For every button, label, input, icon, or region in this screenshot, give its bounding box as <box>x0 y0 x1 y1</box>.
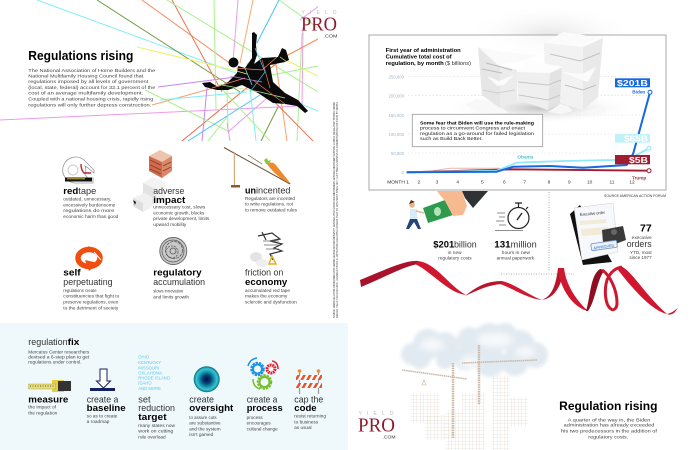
paper stacks illustration <box>445 32 635 124</box>
grid lines and y axis <box>388 74 648 175</box>
step: set reduction target <box>138 355 176 439</box>
panel: friction on economy <box>245 232 297 304</box>
step: cap the code <box>294 369 327 430</box>
chart heading: ($ billions) <box>445 61 471 67</box>
panel: unincented <box>224 148 298 213</box>
chart heading <box>386 48 471 67</box>
panel: self perpetuating: constituencies that fight to <box>63 294 120 299</box>
panel: paperwork hours stat <box>494 203 537 260</box>
x axis months: 11 <box>610 180 615 186</box>
body paragraph <box>28 68 156 108</box>
x axis months: MONTH 1 <box>387 180 409 186</box>
panel: unincented: to write regulations, not <box>245 202 294 207</box>
callout: process to circumvent Congress and enact <box>420 126 526 132</box>
panel: regulation fix <box>0 323 348 450</box>
panel: paperwork hours stat: 131 <box>494 240 511 250</box>
step: measure: the regulation <box>28 411 58 416</box>
panel: regulatory costs stat: billion <box>454 240 477 250</box>
logo: Yield Pro top: PRO <box>301 14 337 36</box>
label: Trump: Trump <box>632 176 647 181</box>
panel: regulation rising summary <box>559 399 658 439</box>
top haze behind paper <box>465 4 635 68</box>
panel: adverse impact: adverse <box>153 186 184 197</box>
body paragraph: The National Association of Home Builders and the <box>28 68 156 73</box>
panel: red tape: economic harm than good <box>63 214 119 219</box>
x axis months: 2 <box>418 180 421 186</box>
panel: friction on economy: friction on <box>245 268 283 279</box>
heading: regulation fix: fix <box>68 337 80 348</box>
panel: paperwork hours stat: annual paperwork <box>497 255 535 260</box>
panel: self perpetuating: regulations create <box>63 288 97 293</box>
icon: arrow onto baseline <box>90 369 115 391</box>
grid lines and y axis: 50,000 <box>391 151 405 156</box>
panel: red tape: regulations do more <box>63 208 115 213</box>
illustration: cloud and cranes over buildings <box>401 323 548 450</box>
panel: regulatory accumulation: slows innovation <box>153 289 184 294</box>
icon: executive order and stamp: Executive order <box>580 210 605 217</box>
body paragraph: regulations will only further depress construction. <box>28 103 151 108</box>
panel: self perpetuating: to the detriment of society <box>63 305 119 310</box>
panel: adverse impact: impact <box>153 195 186 206</box>
state list <box>138 355 171 391</box>
x axis months: 5 <box>481 180 484 186</box>
panel: red tape: tape <box>78 186 96 197</box>
panel: regulation rising summary: A quarter of the way in, the Biden <box>568 417 651 422</box>
label: Biden: $201B <box>617 78 648 88</box>
grid lines and y axis: 150,000 <box>388 113 405 118</box>
x axis months: 4 <box>456 180 459 186</box>
colored lines background <box>0 0 327 141</box>
step: create a process: create a <box>247 394 278 405</box>
grid lines and y axis: 200,000 <box>388 94 405 98</box>
panel: red tape <box>63 157 119 219</box>
step: create oversight: isn't gamed <box>189 432 214 437</box>
callout: Some fear that Biden will use the rule-making <box>420 120 534 126</box>
step: create oversight: are substantive <box>189 421 221 426</box>
intro text: devised a 6-step plan to get <box>28 354 90 359</box>
icon: friction machine <box>250 232 282 267</box>
x axis months: 9 <box>568 180 571 186</box>
icon: scribble ball <box>160 238 187 264</box>
panel: self perpetuating <box>63 246 120 310</box>
x axis months: 10 <box>587 180 593 186</box>
panel: regulatory costs stat: regulatory costs <box>438 255 472 260</box>
step: create oversight: create <box>189 394 214 405</box>
icon: carrot on stick <box>224 148 291 188</box>
vertical source credits: IMAGES: YIELD PRO GRAPHICS, LICENSED STOCK ILLUSTRATION; EXECUTIVE ORDERS YEAR TO DATE MOST SINCE 1977; LAST TWELVE MONTHS OF ADMINISTRATION COST DATA BY MONTH <box>335 102 339 318</box>
panel: self perpetuating: perpetuating <box>63 277 113 288</box>
step: baseline <box>87 369 126 424</box>
step: create a process: process <box>247 415 263 420</box>
panel: regulation rising summary: regulatory costs. <box>588 434 628 439</box>
step: measure: the impact of <box>28 404 57 409</box>
logo: Yield Pro top: .COM <box>324 34 338 38</box>
panel: executive orders stat: 77 <box>640 223 652 235</box>
panel: regulatory accumulation: accumulation <box>153 277 205 288</box>
label: Biden <box>615 78 650 94</box>
panel: adverse impact: unnecessary cost, slows <box>153 204 206 209</box>
step: cap the code: to business <box>294 419 319 424</box>
grid lines and y axis: 250,000 <box>388 74 405 80</box>
panel: regulatory costs stat <box>406 191 488 260</box>
step: create oversight <box>189 366 234 437</box>
panel: adverse impact <box>133 150 210 227</box>
intro text: Mercatus Center researchers <box>28 349 90 354</box>
panel: executive orders stat: executive <box>632 235 652 240</box>
panel: friction on economy: accumulated red tape <box>245 288 291 293</box>
icon: tape measure <box>28 380 71 392</box>
step: set reduction target: set <box>138 394 151 405</box>
grid lines and y axis: 100,000 <box>388 132 405 137</box>
vertical source credits <box>332 102 339 318</box>
panel: regulatory costs stat: $201 <box>433 240 454 250</box>
step: set reduction target: many states now <box>138 423 176 428</box>
logo: Yield Pro bottom: PRO <box>358 416 395 436</box>
body paragraph: (local, state, federal) account for 32.1 percent of the <box>28 85 156 90</box>
step: create oversight: to assure cuts <box>189 415 217 420</box>
label: Trump <box>615 155 650 181</box>
panel: adverse impact: upward mobility <box>153 222 187 227</box>
panel: paperwork hours stat: million <box>511 240 537 250</box>
x axis months: 3 <box>436 180 439 186</box>
vertical source credits: SOURCE: AMERICAN ACTION FORUM; MERCATUS CENTER GEORGE MASON UNIVERSITY; NATIONAL ASSOCIATION OF HOME BUILDERS; NATIONAL MULTIFAMILY HOUSING COUNCIL; REGULATORY STUDIES CENTER <box>332 102 336 318</box>
panel: adverse impact: private development, limits <box>153 216 210 221</box>
step: baseline: baseline <box>87 403 126 414</box>
logo: Yield Pro top: YIELD <box>302 10 337 16</box>
panel: red tape: outdated, unnecessary, <box>63 197 111 202</box>
chart heading: regulation, by month <box>386 61 444 67</box>
cranes <box>402 345 537 438</box>
panel: regulatory costs stat: in new <box>448 250 462 255</box>
body paragraph: Coupled with a national housing crisis, rapidly rising <box>28 97 154 102</box>
heading: regulation fix: regulation <box>28 337 68 348</box>
x axis months: 7 <box>523 180 526 186</box>
state list: KENTUCKY <box>138 360 161 365</box>
red ribbon <box>360 261 678 315</box>
panel: executive orders stat <box>570 203 652 265</box>
body paragraph: cost of an average multifamily development. <box>28 91 143 96</box>
logo: Yield Pro bottom: YIELD <box>358 411 394 417</box>
chart heading: First year of administration <box>386 48 461 54</box>
panel: regulation rising summary: Regulation rising <box>559 399 657 413</box>
buildings <box>410 375 528 450</box>
step: cap the code: code <box>294 403 317 414</box>
step: set reduction target: target <box>138 412 167 423</box>
x axis months <box>387 180 635 186</box>
state list: OHIO <box>138 355 149 360</box>
panel: regulation rising summary: his two predecessors in the addition of <box>561 428 658 433</box>
step: baseline: create a <box>87 394 119 405</box>
icon: executive order and stamp: APPROVED <box>593 244 615 250</box>
label: Biden: Biden <box>632 89 646 94</box>
x axis months: 6 <box>503 180 506 186</box>
step: set reduction target: reduction <box>138 403 175 414</box>
panel: executive orders stat: YTD, most <box>630 250 652 255</box>
panel: unincented: un <box>245 185 256 196</box>
panel: red tape: red <box>63 186 78 197</box>
panel: red tape: excessively burdensome <box>63 202 116 207</box>
data lines <box>407 90 652 173</box>
panel: friction on economy: economy <box>245 277 288 288</box>
step: measure: measure <box>28 394 68 405</box>
state list: OKLAHOMA <box>138 370 162 375</box>
step: cap the code: cap the <box>294 394 323 405</box>
step: baseline: so as to create <box>87 413 118 418</box>
chart heading: Cumulative total cost of <box>386 55 452 61</box>
step: create oversight: oversight <box>189 403 234 414</box>
panel: regulations rising intro <box>0 0 327 141</box>
step: create a process: cultural change <box>247 426 278 431</box>
panel: line chart <box>369 4 666 198</box>
callout: such as Build Back Better. <box>420 136 483 142</box>
step: measure <box>28 380 71 416</box>
step: baseline: a roadmap <box>87 419 110 424</box>
panel: adverse impact: economic growth, blocks <box>153 210 205 215</box>
icon: hand giving money to man <box>406 191 488 229</box>
icon: executive order and stamp <box>570 203 626 265</box>
logo: Yield Pro bottom: .COM <box>382 434 396 440</box>
step: set reduction target: rule overload <box>138 434 166 439</box>
panel: unincented: Regulators are incented <box>245 196 296 201</box>
icon: building on steps <box>133 150 172 212</box>
panel: self perpetuating: preserve regulations, even <box>63 299 119 304</box>
icon: circular arrows <box>78 246 101 271</box>
title: Regulations rising <box>28 49 133 63</box>
grid lines and y axis: 0 <box>402 170 405 175</box>
intro text <box>28 349 90 364</box>
panel: regulatory accumulation <box>153 238 205 299</box>
falling figure silhouette <box>202 32 308 113</box>
x axis months: 12 <box>629 180 635 186</box>
state list: IDAHO <box>138 381 152 386</box>
step: cap the code: resist returning <box>294 414 327 419</box>
panel: regulatory accumulation: regulatory <box>153 268 202 279</box>
panel: friction on economy: makes the economy <box>245 294 288 299</box>
panel: executive orders stat: orders <box>627 239 652 249</box>
panel: unincented: incented <box>256 185 290 196</box>
step: create a process: encourages <box>247 421 271 426</box>
step: cap the code: as usual <box>294 425 312 430</box>
icon: road barricade <box>296 369 322 394</box>
label: Obama <box>517 134 650 160</box>
state list: AND MORE <box>138 386 161 391</box>
colored lines over figure <box>212 48 290 104</box>
panel: unincented: to remove outdated rules <box>245 208 298 213</box>
body paragraph: National Multifamily Housing Council found that <box>28 74 144 79</box>
callout <box>412 114 543 147</box>
cloud <box>401 323 548 377</box>
label: Obama: $65B <box>624 134 648 144</box>
label: Obama: Obama <box>517 155 534 160</box>
dotted dividers <box>501 192 574 274</box>
step: create a process: process <box>247 403 283 414</box>
panel: regulatory accumulation: and limits growth <box>153 294 190 299</box>
icon: eye <box>194 366 220 392</box>
icon: gears <box>248 358 278 389</box>
state list: RHODE ISLAND <box>138 375 171 380</box>
panel: friction on economy: sclerotic and dysfunction <box>245 299 297 304</box>
icon: stopwatch <box>495 203 529 230</box>
step: set reduction target: work on cutting <box>138 429 174 434</box>
panel: self perpetuating: self <box>63 268 81 279</box>
source: SOURCE AMERICAN ACTION FORUM <box>604 194 666 198</box>
icon: tape dispenser <box>63 157 94 183</box>
callout: regulation as a go-around for failed legislation <box>420 131 534 137</box>
step: create a process <box>247 358 283 431</box>
panel: paperwork hours stat: hours in new <box>502 250 531 255</box>
state list: MISSOURI <box>138 365 159 370</box>
panel: executive orders stat: since 1977 <box>629 255 652 260</box>
step: create oversight: and the system <box>189 426 221 431</box>
label: Trump: $5B <box>629 155 648 165</box>
panel: regulation rising summary: administration has already exceeded <box>564 423 655 428</box>
body paragraph: regulations imposed by all levels of government <box>28 79 149 84</box>
x axis months: 8 <box>548 180 551 186</box>
intro text: regulations under control. <box>28 359 82 364</box>
